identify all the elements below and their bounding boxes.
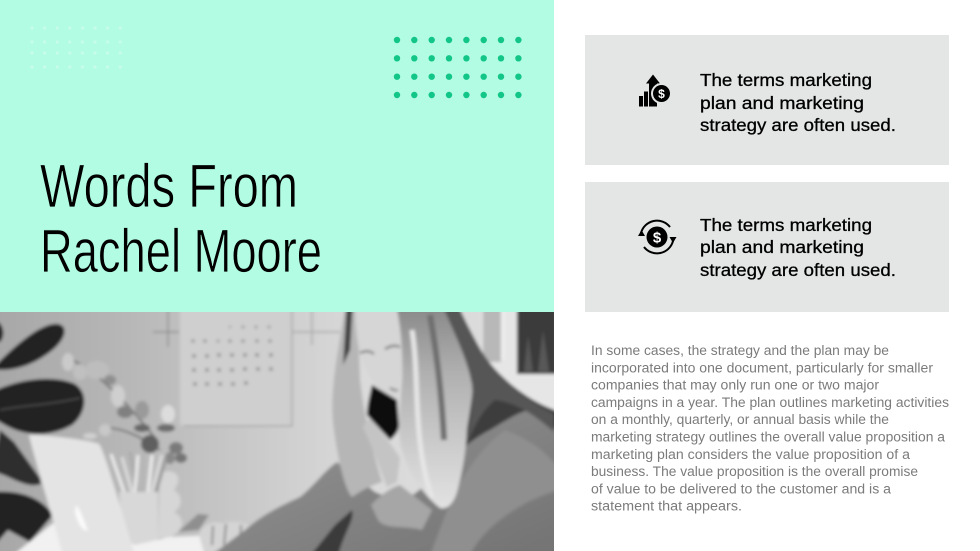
card one text: The terms marketing (700, 70, 872, 90)
card two text (700, 215, 896, 280)
body paragraph: on a monthly, quarterly, or annual basis while the (591, 412, 889, 427)
green dot grid (394, 36, 522, 98)
body paragraph: campaigns in a year. The plan outlines marketing activities (591, 395, 949, 410)
vase (158, 471, 182, 538)
card one text: strategy are often used. (700, 115, 896, 135)
body paragraph: statement that appears. (591, 499, 742, 514)
panel: mint title block (0, 0, 554, 312)
hand on laptop (199, 522, 262, 551)
faint white dot grid (30, 26, 122, 68)
photo: woman on the phone at a desk (0, 312, 554, 551)
card two text: plan and marketing (700, 237, 864, 257)
icon: dollar coin with circular arrows: $ (653, 230, 662, 246)
woman: cuff (371, 485, 432, 530)
body paragraph (591, 343, 949, 514)
card two text: strategy are often used. (700, 260, 896, 280)
woman: blonde hair (395, 300, 473, 508)
body paragraph: business. The value proposition is the overall promise (591, 464, 918, 479)
woman: left hair (332, 300, 382, 497)
icon: dollar coin with circular arrows (638, 220, 676, 254)
woman: hand (363, 420, 400, 487)
card two text: The terms marketing (700, 215, 872, 235)
card one text: plan and marketing (700, 93, 864, 113)
body paragraph: In some cases, the strategy and the plan may be (591, 343, 889, 358)
body paragraph: marketing plan considers the value proposition of a (591, 447, 911, 462)
title: Rachel Moore (40, 217, 322, 285)
flower branch (72, 360, 160, 450)
title: Words From (40, 152, 298, 220)
body paragraph: marketing strategy outlines the overall value proposition a (591, 430, 945, 444)
wall poster (180, 300, 292, 425)
woman: phone (367, 385, 399, 440)
pens and cup (111, 452, 166, 492)
title (40, 152, 322, 285)
plant leaves (0, 321, 84, 548)
body paragraph: incorporated into one document, particularly for smaller (591, 360, 934, 375)
table (12, 515, 215, 551)
body paragraph: companies that may only run one or two major (591, 378, 880, 393)
woman: sweater (205, 410, 560, 551)
panel: card one (585, 35, 949, 165)
body paragraph: of value to be delivered to the customer and is a (591, 481, 891, 496)
icon: rising bars with dollar coin (639, 74, 670, 106)
icon: rising bars with dollar coin: $ (658, 87, 665, 101)
woman: face (355, 300, 403, 401)
woman: back hair (400, 300, 560, 480)
panel: card two (585, 182, 949, 312)
laptop (29, 435, 135, 551)
card one text (700, 70, 896, 135)
picture frame on right wall (482, 300, 562, 410)
